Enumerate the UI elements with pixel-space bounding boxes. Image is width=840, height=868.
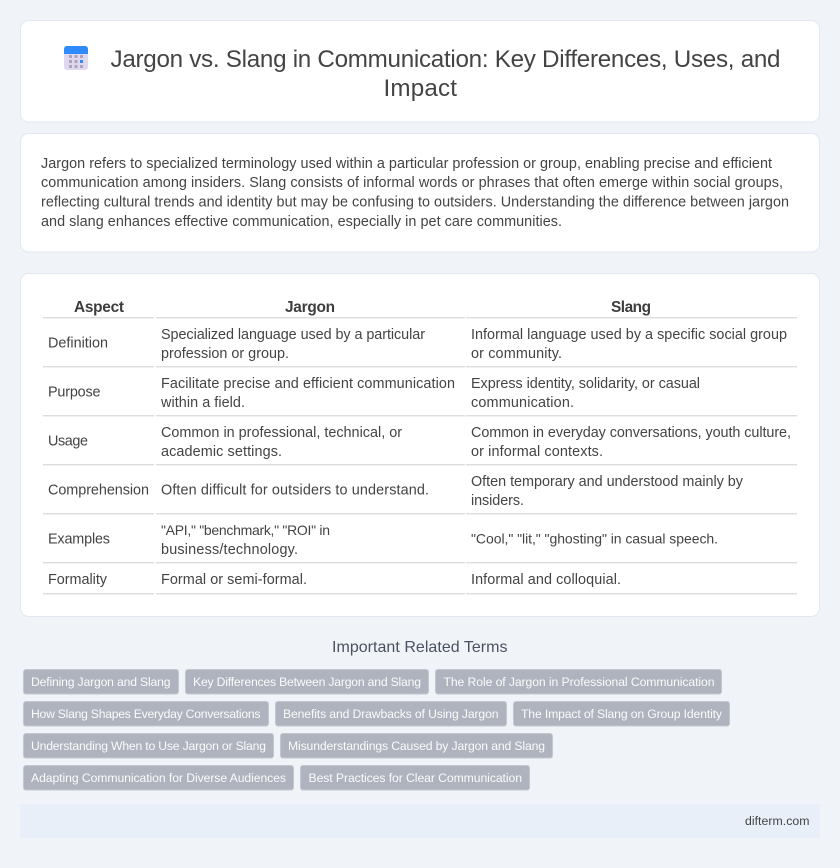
- tag: Defining Jargon and Slang: [31, 675, 170, 689]
- table header row: Jargon: [285, 299, 335, 316]
- tag: How Slang Shapes Everyday Conversations: [31, 707, 260, 721]
- tag: Benefits and Drawbacks of Using Jargon: [283, 707, 498, 721]
- tag: Understanding When to Use Jargon or Slang: [31, 739, 266, 753]
- table row: comprehension: insiders.: [471, 493, 524, 509]
- tag list: related terms: [24, 670, 730, 790]
- table row: formality: Formal or semi-formal.: [161, 572, 307, 588]
- table row: usage: [48, 425, 791, 460]
- table row: examples: Examples: [48, 532, 110, 548]
- table row: definition: Specialized language used by a particular: [161, 327, 425, 343]
- tag: [24, 670, 178, 694]
- tag: [24, 734, 274, 758]
- tag: Adapting Communication for Diverse Audiences: [31, 771, 286, 785]
- tag: [186, 670, 428, 694]
- text block: introduction paragraph: communication among insiders. Slang consists of informal words or phrases that often emerge within social groups,: [41, 175, 783, 191]
- icon: calendar: [64, 46, 88, 70]
- table row: usage: Usage: [48, 434, 88, 450]
- table row: usage: Common in everyday conversations, youth culture,: [471, 425, 791, 441]
- tag: [276, 702, 506, 726]
- title: [110, 46, 780, 102]
- table row: comprehension: Often difficult for outsiders to understand.: [161, 482, 429, 498]
- table row: usage: Common in professional, technical, or: [161, 425, 402, 441]
- table header row: Aspect: [74, 299, 124, 316]
- heading: important related terms: Important Related Terms: [332, 639, 508, 656]
- table row: purpose: Facilitate precise and efficient communication: [161, 376, 455, 392]
- tag: [436, 670, 722, 694]
- table row: definition: Definition: [48, 336, 108, 352]
- panel: introduction: [20, 134, 820, 252]
- table row: purpose: communication.: [471, 395, 574, 411]
- table row: examples: "Cool," "lit," "ghosting" in casual speech.: [471, 530, 718, 546]
- tag: [280, 734, 552, 758]
- tag: [514, 702, 730, 726]
- table row: usage: or informal contexts.: [471, 444, 603, 460]
- table row: definition: [48, 327, 787, 362]
- tag: Best Practices for Clear Communication: [308, 771, 522, 785]
- table row: examples: "API," "benchmark," "ROI" in: [161, 522, 330, 538]
- tag: Key Differences Between Jargon and Slang: [193, 675, 421, 689]
- table row: comprehension: [48, 474, 744, 509]
- text block: introduction paragraph: reflecting cultural trends and identity but may be confusing to outsiders. Understanding the difference between jargon: [41, 194, 789, 210]
- panel: comparison table: [20, 274, 820, 616]
- table row: comprehension: Often temporary and understood mainly by: [471, 474, 744, 490]
- table row: formality: [48, 572, 621, 588]
- table row: definition: profession or group.: [161, 346, 289, 362]
- tag: The Impact of Slang on Group Identity: [521, 707, 723, 721]
- table row: formality: Informal and colloquial.: [471, 572, 621, 588]
- table row: examples: business/technology.: [161, 542, 298, 558]
- tag: [24, 702, 268, 726]
- table row: purpose: within a field.: [160, 395, 245, 411]
- panel: header: [20, 20, 820, 122]
- table row: comprehension: Comprehension: [48, 482, 149, 498]
- tag: [300, 766, 530, 790]
- table header row: Slang: [611, 299, 651, 316]
- footer: difterm.com: [745, 814, 810, 828]
- table row: purpose: [48, 376, 700, 411]
- tag: [24, 766, 294, 790]
- table row: definition: Informal language used by a specific social group: [471, 327, 787, 343]
- table header row: [74, 299, 651, 316]
- table row: usage: academic settings.: [161, 444, 282, 460]
- title: Jargon vs. Slang in Communication: Key Differences, Uses, and: [110, 46, 780, 73]
- footer: [20, 804, 820, 838]
- tag: Misunderstandings Caused by Jargon and Slang: [288, 739, 545, 753]
- text block: introduction paragraph: [41, 156, 789, 230]
- text block: introduction paragraph: and slang enhances effective communication, especially in pet care communities.: [41, 214, 562, 230]
- table row: purpose: Express identity, solidarity, or casual: [471, 376, 700, 392]
- table row: purpose: Purpose: [48, 384, 100, 400]
- table row: formality: Formality: [48, 572, 108, 588]
- table row: definition: or community.: [471, 346, 562, 362]
- table row: examples: [48, 522, 718, 558]
- tag: The Role of Jargon in Professional Communication: [444, 675, 714, 689]
- title: Impact: [384, 75, 457, 102]
- text block: introduction paragraph: Jargon refers to specialized terminology used within a particular profession or group, enabling precise and efficient: [41, 156, 772, 172]
